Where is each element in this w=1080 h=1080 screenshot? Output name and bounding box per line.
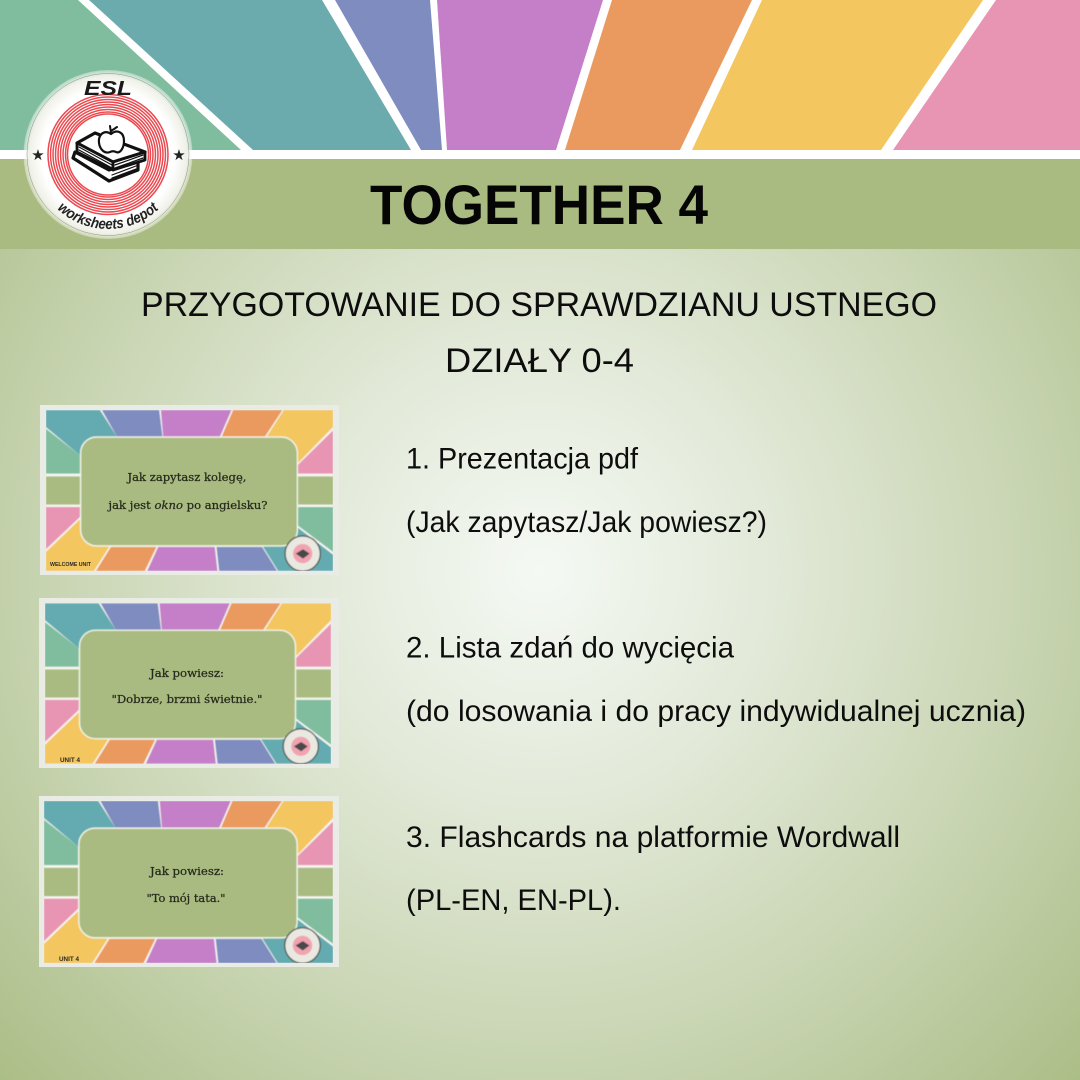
item 1 text: (Jak zapytasz/Jak powiesz?) bbox=[406, 506, 767, 539]
logo ESL wordmark: ESL bbox=[84, 78, 132, 100]
card 3 text bbox=[146, 865, 226, 905]
card 1 text bbox=[106, 471, 268, 512]
top banner: colored stripes bbox=[0, 0, 1080, 159]
card 3 text: "To mój tata." bbox=[146, 892, 226, 905]
logo: ESL worksheets depot bbox=[24, 70, 192, 239]
item 3 text bbox=[406, 821, 900, 917]
card 2 text: "Dobrze, brzmi świetnie." bbox=[112, 693, 262, 706]
card 1 text: jak jest okno po angielsku? bbox=[106, 499, 268, 512]
card 3 unit label: UNIT 4 bbox=[59, 957, 80, 963]
thumbnail card 1 bbox=[40, 405, 339, 575]
item 2 text: (do losowania i do pracy indywidualnej ucznia) bbox=[406, 695, 1026, 728]
subtitle: PRZYGOTOWANIE DO SPRAWDZIANU USTNEGO bbox=[141, 286, 937, 324]
card 3 text: Jak powiesz: bbox=[149, 865, 224, 878]
title: TOGETHER 4 bbox=[370, 173, 708, 236]
logo icon: books and apple bbox=[73, 126, 145, 181]
item 1 text: 1. Prezentacja pdf bbox=[406, 442, 639, 476]
logo: ESL worksheets depot: ★ bbox=[172, 146, 186, 164]
card 1 text: Jak zapytasz kolegę, bbox=[126, 471, 246, 484]
logo red rings bbox=[48, 94, 168, 214]
item 3 text: 3. Flashcards na platformie Wordwall bbox=[406, 821, 900, 854]
item 2 text bbox=[406, 632, 1026, 728]
logo caption: worksheets depot bbox=[58, 202, 158, 230]
thumbnail card 2 bbox=[39, 598, 339, 768]
subtitle bbox=[141, 286, 937, 380]
item 1 text bbox=[406, 442, 767, 539]
card 2 text: Jak powiesz: bbox=[149, 667, 224, 680]
card 2 text bbox=[112, 667, 262, 706]
subtitle: DZIAŁY 0-4 bbox=[445, 342, 634, 380]
card 2 unit label: UNIT 4 bbox=[60, 758, 81, 764]
logo stars: ★ bbox=[31, 146, 45, 164]
card 1 unit label: WELCOME UNIT bbox=[50, 562, 92, 568]
header band bbox=[0, 159, 1080, 249]
thumbnail card 3 bbox=[39, 796, 339, 967]
item 2 text: 2. Lista zdań do wycięcia bbox=[406, 632, 734, 664]
item 3 text: (PL-EN, EN-PL). bbox=[406, 884, 621, 917]
